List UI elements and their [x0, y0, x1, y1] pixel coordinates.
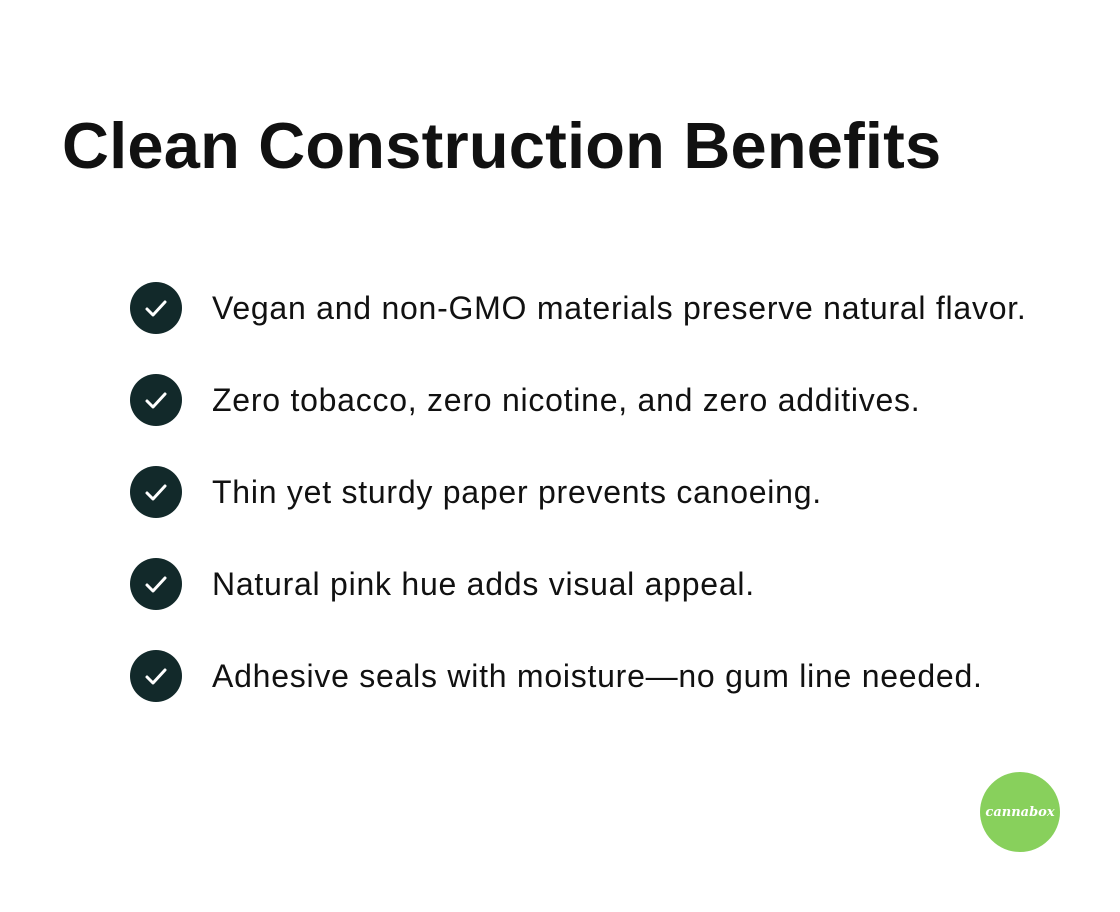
icon: check [130, 466, 182, 518]
icon: check [130, 650, 182, 702]
icon: check [130, 282, 182, 334]
benefit 3 [130, 466, 822, 518]
icon: check [130, 558, 182, 610]
text: Vegan and non-GMO materials preserve natural flavor. [212, 290, 1027, 326]
benefit 5 [130, 650, 983, 702]
title: Clean Construction Benefits [62, 109, 941, 182]
logo: cannabox: cannabox [985, 804, 1055, 820]
icon: check [130, 374, 182, 426]
text: Zero tobacco, zero nicotine, and zero additives. [212, 382, 920, 418]
logo: cannabox [980, 772, 1060, 852]
text: Natural pink hue adds visual appeal. [212, 566, 755, 602]
benefit 1 [130, 282, 1027, 334]
benefit 2 [130, 374, 920, 426]
text: Thin yet sturdy paper prevents canoeing. [212, 474, 822, 510]
text: Adhesive seals with moisture—no gum line needed. [212, 658, 983, 694]
benefit 4 [130, 558, 755, 610]
